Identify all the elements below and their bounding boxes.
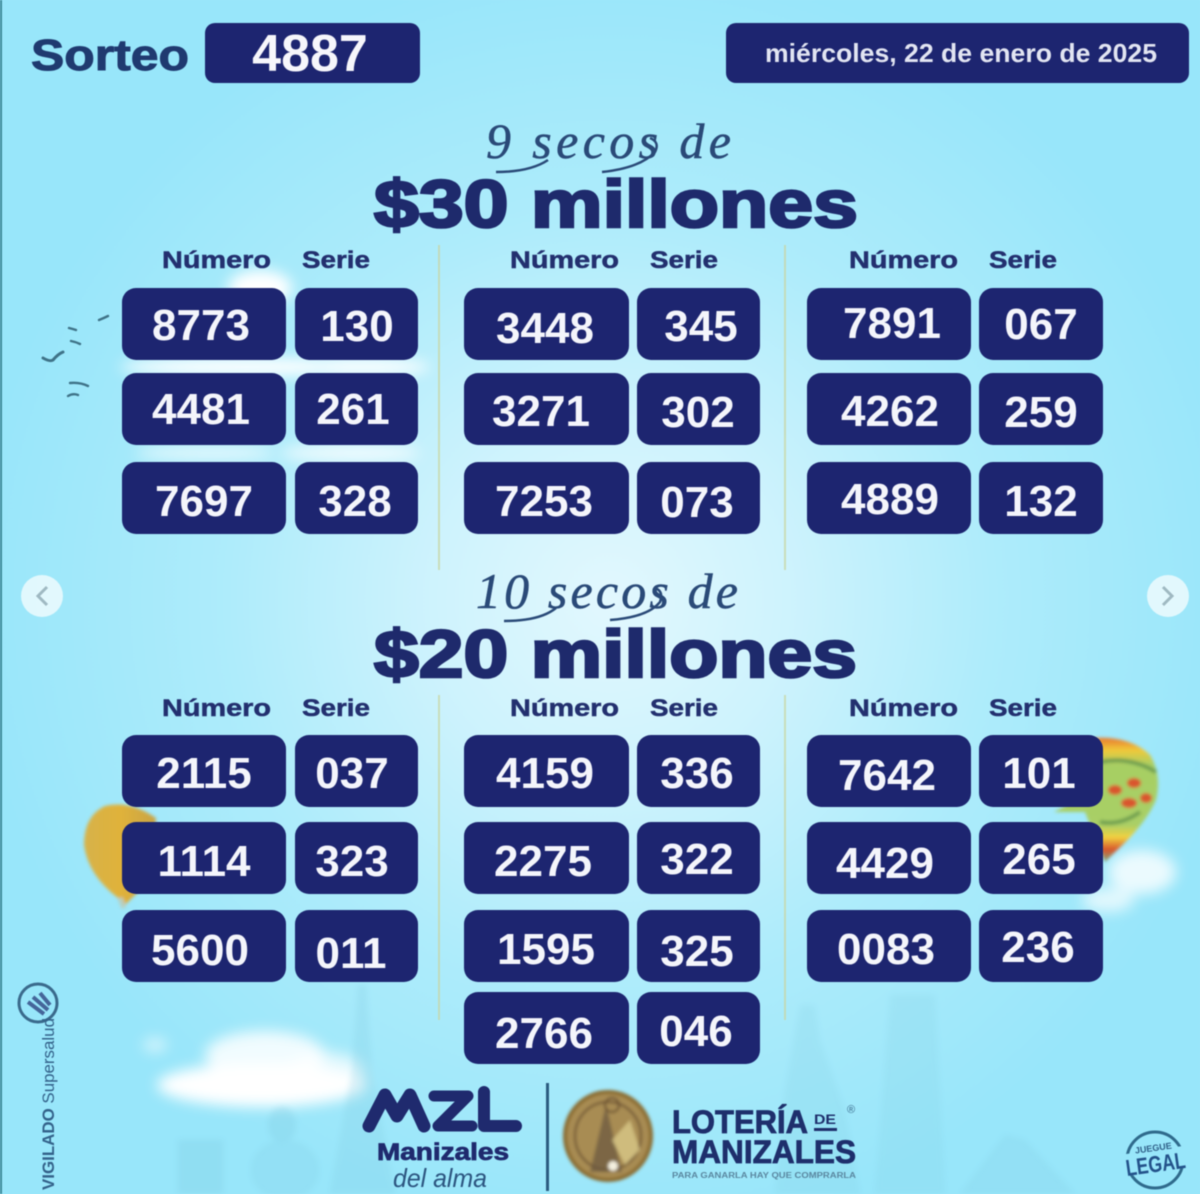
table: 9 secos column 1: 4481 (152, 385, 250, 434)
balloon: right multicolour (1054, 738, 1158, 862)
white clouds (120, 270, 1176, 1107)
table: 9 secos column 1: 8773 (152, 301, 250, 350)
column headers: lower: Número (162, 695, 271, 722)
table: 10 secos column 1: 2115 (156, 749, 252, 798)
sorteo heading: Sorteo (31, 31, 189, 80)
table: 10 secos column 2: 325 (660, 927, 734, 976)
table: 9 secos column 2 (464, 288, 760, 534)
sorteo number badge: 4887 (252, 25, 368, 83)
logo: MZL Manizales del alma (369, 1092, 516, 1193)
vigilado supersalud seal (19, 984, 58, 1190)
faint monuments (178, 985, 1075, 1194)
table: 9 secos column 3: 7891 (843, 299, 941, 348)
table: 10 secos column 3: 0083 (837, 925, 935, 974)
table: 9 secos column 2: 073 (660, 478, 734, 527)
table: 10 secos column 3: 4429 (836, 839, 934, 888)
column headers: lower: Número (510, 695, 619, 722)
logo: MZL Manizales del alma: Manizales (377, 1139, 509, 1166)
logo: Lotería de Manizales: MANIZALES (672, 1134, 856, 1170)
table: 10 secos column 3: 101 (1002, 749, 1076, 798)
table: 9 secos column 2: 345 (664, 302, 738, 351)
table: 10 secos column 2: 2275 (494, 837, 592, 886)
table: 10 secos column 1: 037 (315, 749, 389, 798)
monument: ruins at left (178, 1140, 223, 1194)
logo: lottery gold seal (565, 1092, 651, 1180)
table: 9 secos column 3: 132 (1004, 477, 1078, 526)
table: 10 secos column 1: 011 (316, 929, 386, 978)
logo divider (546, 1083, 549, 1191)
heading: 10 secos de: 10 secos de (476, 563, 738, 619)
logo: Lotería de Manizales (672, 1104, 856, 1180)
table: 9 secos column 2: 3448 (496, 304, 594, 353)
column headers: lower: Serie (650, 695, 718, 722)
column headers: upper: Serie (650, 247, 718, 274)
column headers: upper: Número (162, 247, 271, 274)
monument: statue of Liberty (775, 1005, 860, 1194)
column headers: upper: Serie (989, 247, 1057, 274)
table: 9 secos column 3: 259 (1004, 388, 1078, 437)
dividers (439, 245, 785, 1020)
birds (43, 316, 108, 396)
table: 9 secos column 1: 130 (320, 302, 394, 351)
table: 10 secos column 2: 046 (659, 1007, 733, 1056)
table: 9 secos column 3: 4262 (841, 387, 939, 436)
heading: $20 millones: $20 millones (374, 617, 857, 692)
logo: Lotería de Manizales: PARA GANARLA HAY QUE COMPRARLA (672, 1171, 856, 1180)
badge: juego legal (1121, 1132, 1189, 1188)
table: 10 secos column 3: 7642 (838, 751, 936, 800)
column headers: upper: Serie (302, 247, 370, 274)
logo: MZL Manizales del alma: del alma (393, 1163, 487, 1193)
carousel button: previous (21, 575, 63, 617)
table: 10 secos column 1: 1114 (157, 837, 251, 886)
column headers: lower: Número (849, 695, 958, 722)
table: 10 secos column 2: 336 (660, 749, 734, 798)
column headers: lower (162, 695, 1057, 722)
table: 9 secos column 2: 7253 (495, 477, 593, 526)
table: 9 secos column 1: 7697 (155, 477, 253, 526)
carousel button: next (1147, 575, 1189, 617)
column headers: lower: Serie (302, 695, 370, 722)
monument: Eiffel tower (330, 985, 395, 1194)
table: 10 secos column 2 (464, 735, 760, 1064)
table: 10 secos column 1: 323 (315, 837, 389, 886)
date badge (726, 23, 1189, 83)
badge: juego legal: JUEGUE (1134, 1141, 1172, 1156)
table: 10 secos column 1 (122, 735, 418, 982)
balloon: left yellow (84, 804, 156, 908)
table: 9 secos column 1: 261 (316, 385, 390, 434)
table: 10 secos column 2: 2766 (495, 1009, 593, 1058)
sorteo number badge (205, 23, 420, 83)
table: 10 secos column 3 (807, 735, 1103, 982)
column headers: upper (162, 247, 1057, 274)
table: 9 secos column 3 (807, 288, 1103, 534)
table: 9 secos column 2: 3271 (492, 387, 590, 436)
vigilado supersalud seal: VIGILADO Supersalud (39, 1018, 58, 1190)
table: 9 secos column 3: 4889 (841, 475, 939, 524)
column headers: upper: Número (849, 247, 958, 274)
table: 9 secos column 1 (122, 288, 418, 534)
table: 10 secos column 2: 1595 (497, 925, 595, 974)
table: 9 secos column 2: 302 (661, 388, 735, 437)
table: 10 secos column 3: 265 (1002, 835, 1076, 884)
monument: dome (268, 1107, 296, 1143)
column headers: upper: Número (510, 247, 619, 274)
date badge: miércoles, 22 de enero de 2025 (765, 38, 1157, 68)
heading: 9 secos de: 9 secos de (486, 113, 731, 169)
table: 10 secos column 3: 236 (1001, 923, 1075, 972)
table: 9 secos column 1: 328 (318, 477, 392, 526)
table: 10 secos column 1: 5600 (151, 926, 249, 975)
logo: Lotería de Manizales: DE (814, 1111, 836, 1127)
table: 9 secos column 3: 067 (1004, 300, 1078, 349)
table: 10 secos column 2: 4159 (496, 749, 594, 798)
table: 10 secos column 2: 322 (660, 835, 734, 884)
heading: $30 millones: $30 millones (374, 167, 858, 242)
monument: pyramid (960, 1135, 1075, 1194)
column headers: lower: Serie (989, 695, 1057, 722)
logo: Lotería de Manizales: LOTERÍA (672, 1104, 808, 1140)
monument: leaning tower of Pisa (875, 995, 945, 1194)
logo: Lotería de Manizales: ® (847, 1104, 855, 1116)
